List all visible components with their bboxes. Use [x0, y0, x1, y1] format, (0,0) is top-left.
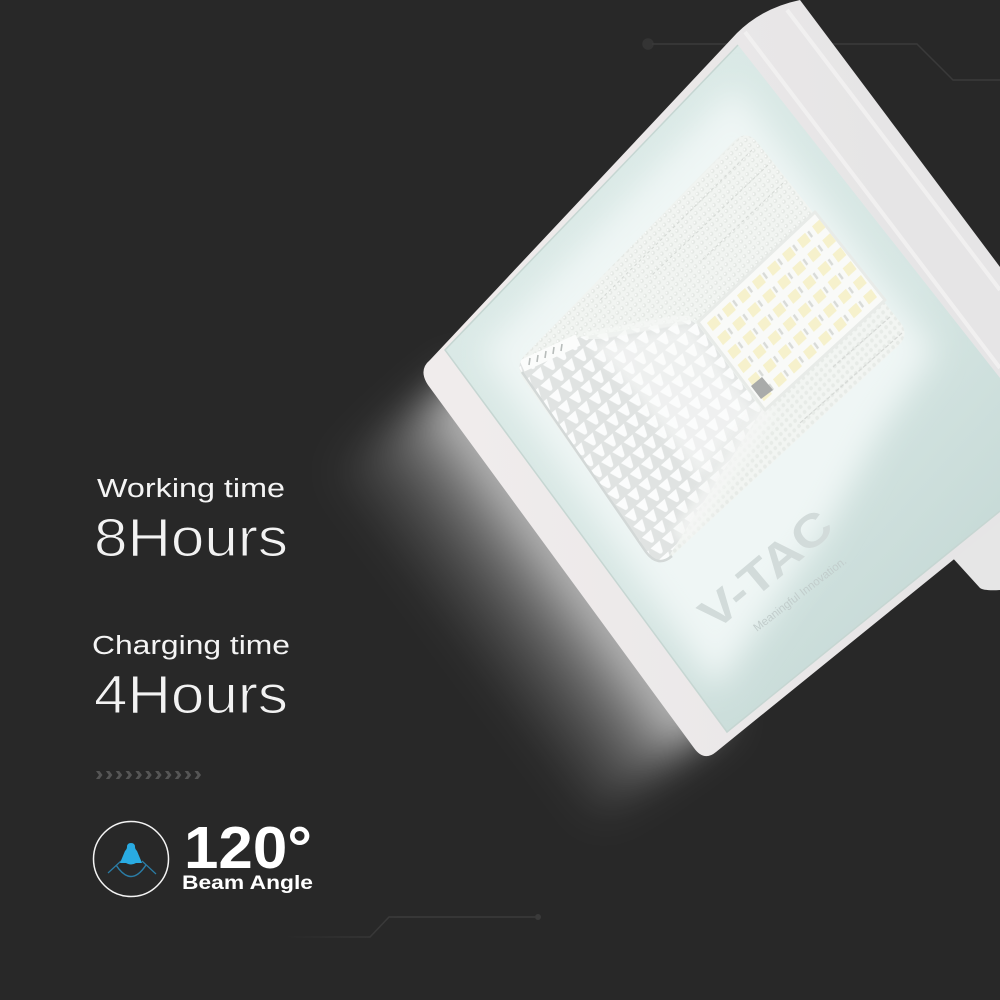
value: 4Hours [94, 665, 288, 725]
glass panel [430, 30, 1000, 750]
chevron divider [96, 771, 201, 779]
value: 8Hours [94, 508, 288, 568]
floodlight lamp [423, 0, 1000, 756]
label: Charging time [92, 632, 290, 660]
lens lower facet wash [598, 327, 750, 474]
label: Working time [97, 475, 285, 503]
V-TAC logo: V-TAC [689, 499, 842, 640]
facet ridge [585, 318, 690, 337]
lens right facet lines [800, 317, 902, 423]
logo tagline: Meaningful Innovation. [752, 555, 849, 634]
strip ticks [529, 344, 562, 365]
LED board [698, 212, 885, 410]
decorative circuit line: bottom [285, 914, 541, 937]
frame ridge [745, 10, 1000, 368]
lens upper facet lines [600, 150, 783, 300]
lens right facet [660, 213, 910, 570]
housing frame [423, 0, 1000, 756]
lens upper facet [522, 136, 810, 359]
light glow beside the lamp [335, 370, 725, 820]
connector plug [950, 520, 1000, 590]
LED chips [702, 214, 882, 406]
glass edge line [445, 45, 1000, 732]
icon: beam angle [94, 822, 168, 896]
decorative circuit line: top right [643, 39, 1000, 80]
lens [520, 136, 904, 560]
lens corner strip [522, 340, 578, 366]
stat: beam angle [182, 815, 313, 894]
lens lower facet fade [680, 405, 770, 540]
label: Beam Angle [182, 872, 313, 894]
lens rim [522, 372, 672, 561]
stat: working time [94, 475, 288, 568]
value: 120° [184, 815, 312, 881]
lens lower-left facet [515, 320, 762, 570]
stat: charging time [92, 632, 290, 725]
board chip [751, 377, 773, 399]
